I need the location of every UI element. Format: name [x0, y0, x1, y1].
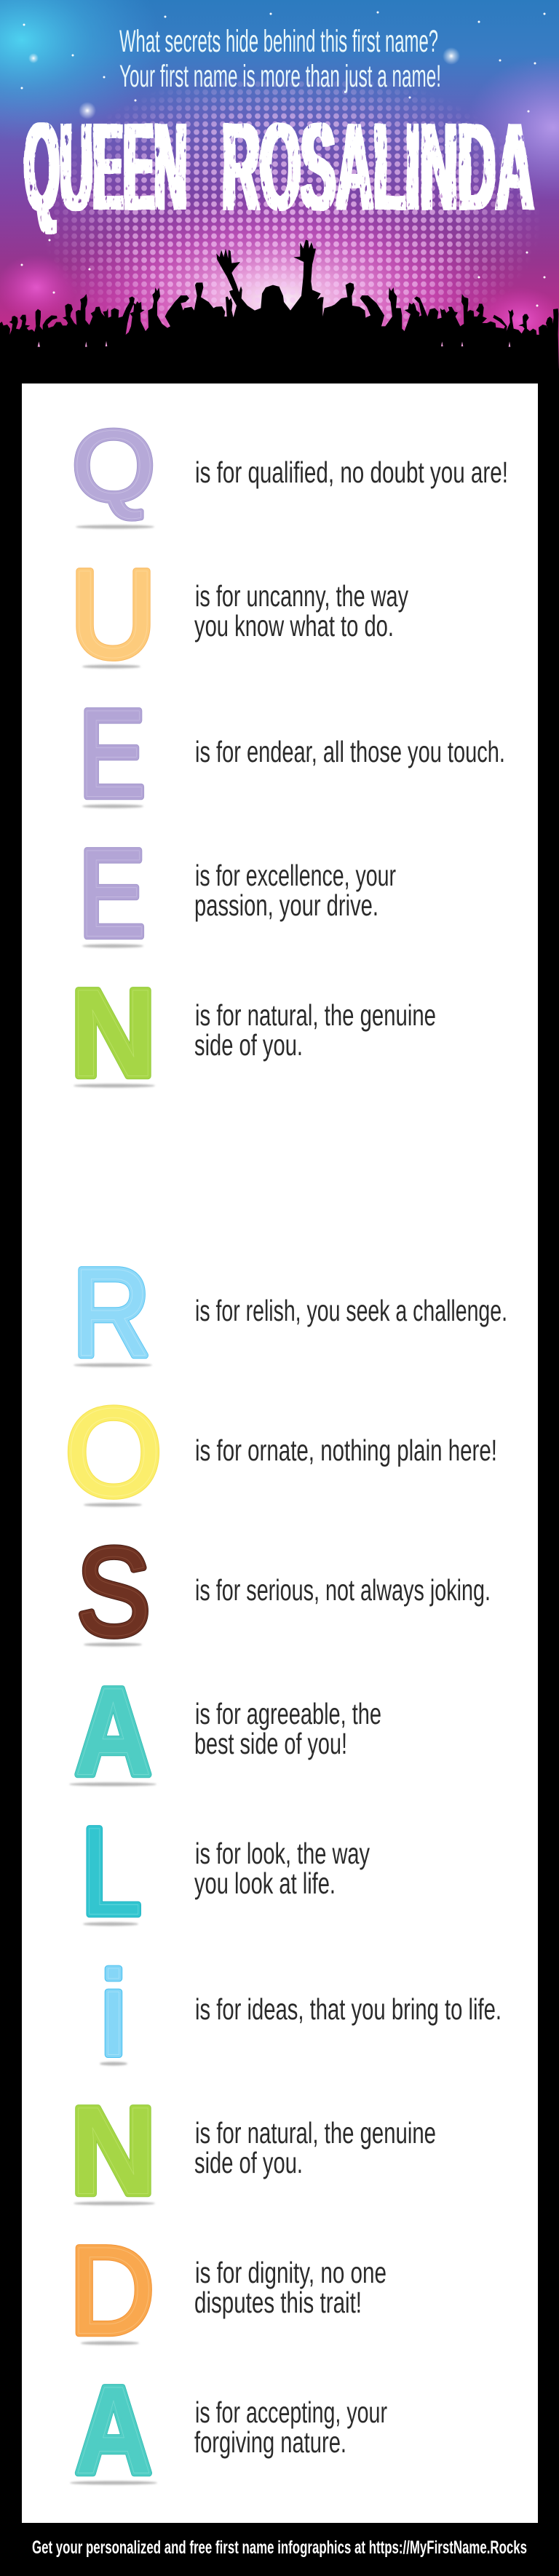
icon: letter A: A	[75, 1662, 151, 1801]
icon: letter D: D	[69, 2222, 154, 2360]
background gradient	[0, 0, 559, 383]
text: N: is for natural, the genuine	[195, 2116, 436, 2150]
row: N	[71, 964, 436, 1102]
icon: letter N: N	[71, 964, 156, 1102]
title: name: QUEEN	[24, 98, 187, 236]
text: L	[194, 1837, 370, 1900]
panel: letters	[22, 383, 538, 2523]
icon: letter L: L	[80, 1802, 142, 1941]
icon: letter i: i	[100, 1948, 127, 2080]
icon: letter E: E	[79, 684, 146, 823]
icon: letter L: L	[80, 1802, 142, 1941]
icon: letter i: i	[100, 1948, 127, 2080]
icon: letter i: i	[100, 1948, 127, 2080]
text: A: forgiving nature.	[194, 2425, 346, 2459]
icon: letter S: S	[76, 1522, 151, 1661]
text: L: is for look, the way	[195, 1837, 370, 1870]
row: L	[80, 1802, 370, 1941]
icon: letter L: L	[80, 1802, 142, 1941]
icon: letter Q: Q	[72, 410, 155, 522]
icon: letter E: E	[79, 684, 146, 823]
icon: letter S: S	[76, 1522, 151, 1661]
crowd silhouette	[0, 239, 559, 386]
lavender glow	[466, 55, 559, 200]
row: R	[72, 1243, 507, 1382]
icon: letter R: R	[72, 1243, 151, 1382]
stars	[20, 12, 546, 307]
icon: letter U: U	[70, 544, 156, 683]
icon: letter E: E	[79, 824, 146, 963]
text: N: side of you.	[194, 2146, 303, 2179]
text: L: you look at life.	[194, 1867, 336, 1900]
row: Q	[72, 410, 508, 528]
row: E	[79, 824, 396, 963]
icon: letter O: O	[65, 1383, 162, 1522]
text: D: is for dignity, no one	[195, 2256, 386, 2289]
text: A: is for agreeable, the	[195, 1697, 381, 1730]
icon: letter D: D	[69, 2222, 154, 2360]
icon: letter E: E	[79, 824, 146, 963]
text: U: is for uncanny, the way	[195, 579, 408, 613]
row: A	[69, 1662, 381, 1801]
row: N	[71, 2082, 436, 2220]
white panel background	[22, 383, 538, 2523]
text: E	[194, 859, 396, 922]
subtitle	[119, 24, 441, 94]
icon: letter N: N	[71, 964, 156, 1102]
text: A: best side of you!	[194, 1727, 347, 1760]
text: A	[194, 1697, 381, 1760]
text: N	[194, 998, 436, 1062]
text: N: side of you.	[194, 1028, 303, 1062]
row: i	[100, 1948, 501, 2080]
text: N	[194, 2116, 436, 2179]
magenta glows	[0, 255, 559, 353]
text: E: passion, your drive.	[194, 889, 378, 922]
icon: letter R: R	[72, 1243, 151, 1382]
icon: letter N: N	[71, 2082, 156, 2220]
text: U	[194, 579, 408, 643]
icon: letter S: S	[76, 1522, 151, 1661]
text: N: is for natural, the genuine	[195, 998, 436, 1032]
text: E: is for excellence, your	[195, 859, 396, 892]
icon: letter Q: Q	[72, 410, 155, 522]
row: A	[70, 2361, 387, 2500]
icon: letter E: E	[79, 824, 146, 963]
icon: letter E: E	[79, 684, 146, 823]
header banner	[0, 0, 559, 369]
row: O	[65, 1383, 497, 1522]
icon: letter N: N	[71, 2082, 156, 2220]
icon: letter O: O	[65, 1383, 162, 1522]
cyan glow	[0, 0, 160, 142]
row: D	[69, 2222, 386, 2360]
icon: letter U: U	[70, 544, 156, 683]
icon: letter A: A	[75, 2361, 152, 2500]
icon: letter A: A	[75, 2361, 152, 2500]
pink stage glow	[54, 193, 505, 411]
icon: letter D: D	[69, 2222, 154, 2360]
icon: letter R: R	[72, 1243, 151, 1382]
text: A: is for accepting, your	[195, 2396, 387, 2429]
icon: letter A: A	[75, 1662, 151, 1801]
icon: letter N: N	[71, 964, 156, 1102]
icon: letter N: N	[71, 2082, 156, 2220]
icon: letter O: O	[65, 1383, 162, 1522]
icon: letter A: A	[75, 2361, 152, 2500]
text: A	[194, 2396, 387, 2459]
icon: letter Q: Q	[72, 410, 155, 522]
row: S	[76, 1522, 491, 1661]
icon: letter U: U	[70, 544, 156, 683]
row: E	[79, 684, 505, 823]
row: U	[70, 544, 408, 683]
icon: letter A: A	[75, 1662, 151, 1801]
text: D: disputes this trait!	[194, 2286, 362, 2319]
text: D	[194, 2256, 386, 2319]
dot matrix	[50, 82, 531, 331]
text: U: you know what to do.	[194, 609, 394, 643]
